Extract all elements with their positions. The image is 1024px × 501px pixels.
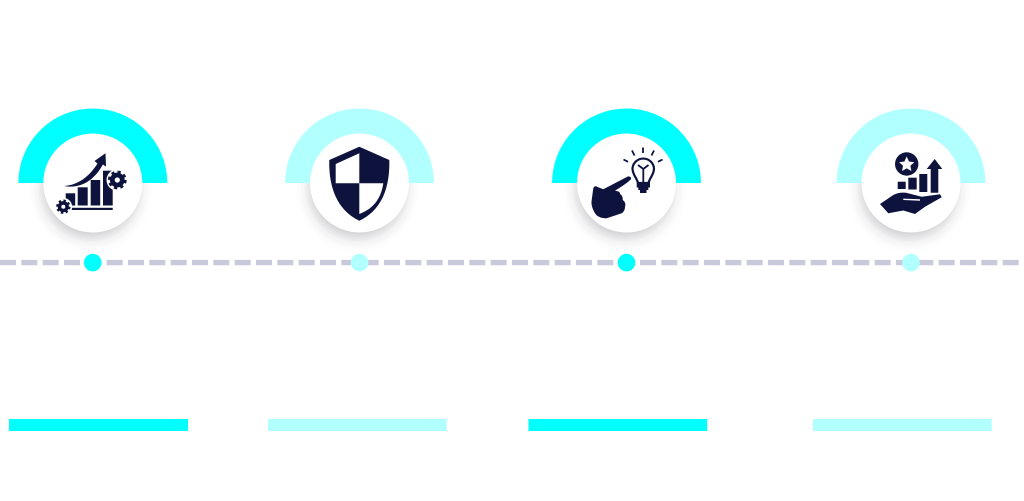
arc: step 3: [552, 108, 701, 183]
icon: shield: [329, 147, 389, 221]
circle: step 3: [577, 134, 676, 232]
shadows under circles: [42, 142, 958, 238]
dashed timeline: [0, 260, 1019, 265]
timeline dot 3: [618, 254, 635, 271]
timeline dot 1: [84, 254, 101, 271]
bar: step 1: [9, 419, 188, 431]
timeline dot 4: [902, 254, 920, 271]
icon: hand pointing at light bulb: [591, 148, 662, 218]
circle: step 2: [310, 134, 409, 232]
circle: step 1: [43, 134, 142, 232]
timeline dot 2: [351, 254, 368, 271]
bar: step 2: [268, 419, 447, 431]
arc: step 2: [285, 108, 434, 183]
bar: step 3: [528, 419, 707, 431]
icon: hand holding rising chart and star: [880, 152, 942, 214]
bar: step 4: [813, 419, 992, 431]
arc: step 4: [836, 108, 986, 183]
arc: step 1: [18, 108, 167, 183]
circle: step 4: [862, 134, 960, 232]
icon: growth chart with gears: [54, 153, 128, 216]
